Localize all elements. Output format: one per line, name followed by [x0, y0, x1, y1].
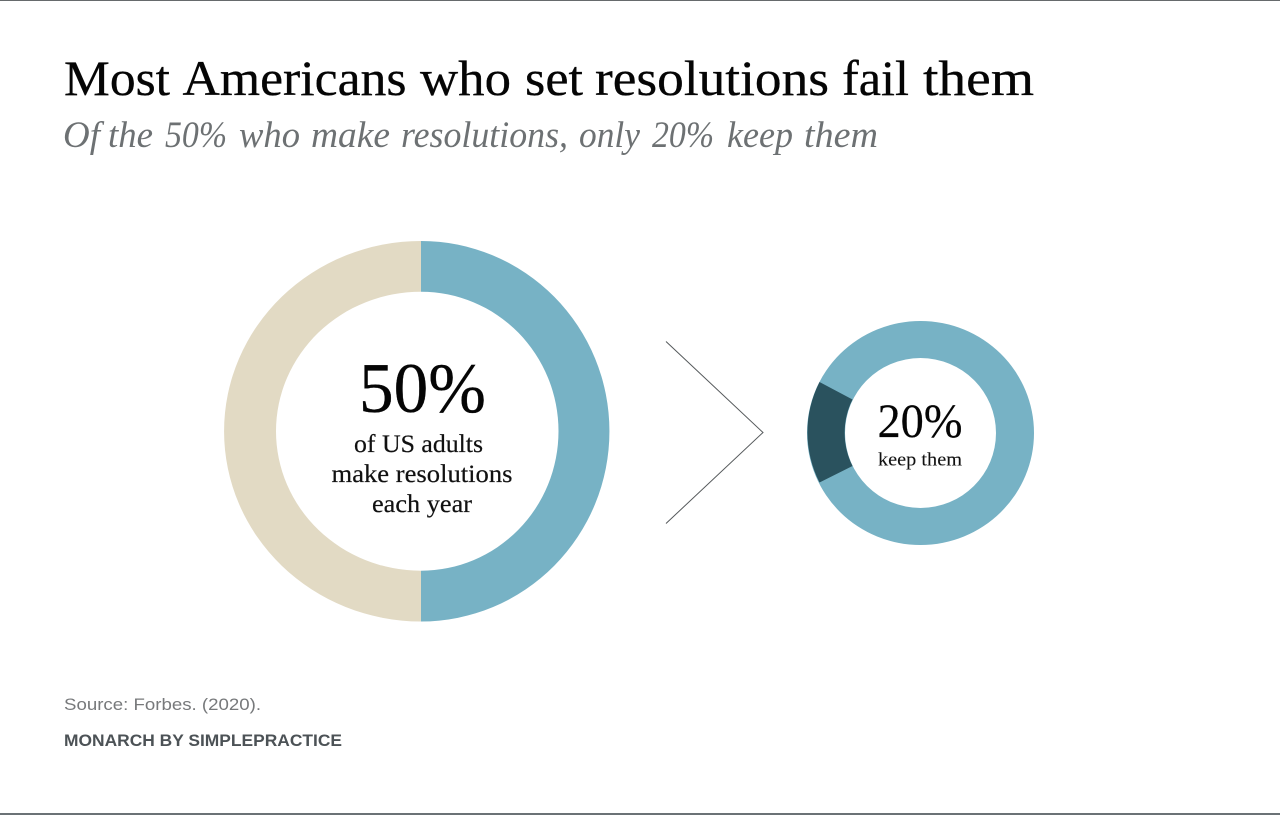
- subtitle: keep: [727, 115, 793, 156]
- label: keep them: keep them: [878, 450, 962, 470]
- donut chart: 50% of US adults: [224, 241, 609, 622]
- title: Americans: [182, 50, 406, 106]
- subtitle: 50%: [165, 115, 227, 156]
- donut segment: dark wedge: [807, 382, 852, 482]
- title: resolutions: [595, 50, 829, 106]
- donut chart: 20% keep them: [807, 321, 1034, 545]
- big number: 50%: 50%: [359, 350, 486, 428]
- brand credit: MONARCH BY SIMPLEPRACTICE: [64, 731, 342, 750]
- subtitle: 20%: [652, 115, 714, 156]
- donut segment: blue half: [421, 241, 609, 622]
- title: set: [525, 50, 583, 106]
- label: of US adults make resolutions each year: of US adults: [354, 431, 483, 458]
- subtitle: make: [311, 115, 390, 156]
- subtitle: resolutions,: [401, 115, 568, 156]
- label: of US adults make resolutions each year: make resolutions: [332, 461, 512, 488]
- title: [64, 50, 1034, 106]
- subtitle: them: [804, 115, 878, 156]
- title: who: [420, 50, 511, 106]
- title: Most: [64, 50, 170, 106]
- donut segment: beige half: [224, 241, 421, 622]
- arrow: chevron pointing right: [666, 342, 763, 524]
- label: of US adults make resolutions each year: [332, 431, 512, 518]
- title: fail: [842, 50, 909, 106]
- subtitle: Of: [63, 115, 105, 156]
- source note: Source: Forbes. (2020).: [64, 695, 261, 714]
- big number: 20%: 20%: [878, 395, 962, 448]
- donut segment: blue remainder: [807, 321, 1034, 545]
- subtitle: who: [239, 115, 300, 156]
- label: of US adults make resolutions each year: each year: [372, 491, 473, 518]
- subtitle: the: [108, 115, 153, 156]
- title: them: [923, 50, 1034, 106]
- subtitle: only: [579, 115, 641, 156]
- subtitle: [63, 115, 878, 156]
